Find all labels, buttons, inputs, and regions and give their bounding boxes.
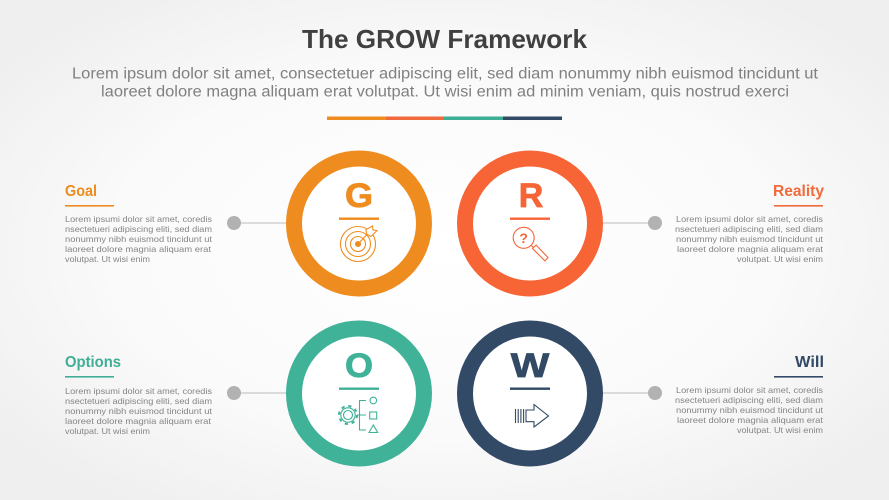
panel: goal xyxy=(65,158,424,288)
heading: will: Will xyxy=(795,354,824,371)
text block: reality xyxy=(675,214,824,264)
panel: options xyxy=(65,328,424,458)
underline: will xyxy=(774,376,823,378)
icon: magnifier with question mark xyxy=(513,227,548,261)
rule: R xyxy=(510,218,550,220)
letter: O: O xyxy=(345,347,373,385)
heading: goal: Goal xyxy=(65,183,97,200)
underline: options xyxy=(65,376,114,378)
connector: goal xyxy=(227,216,287,230)
panel: will xyxy=(465,328,824,458)
icon: gear with branching shapes xyxy=(339,397,378,432)
text block: reality: laoreet dolore magnia aliquam erat xyxy=(677,244,824,254)
text block: will: laoreet dolore magnia aliquam erat xyxy=(677,415,824,425)
text block: will: volutpat. Ut wisi enim xyxy=(737,425,823,435)
connector: options xyxy=(227,386,287,400)
ring: options xyxy=(294,328,424,458)
letter: R: R xyxy=(519,177,543,215)
underline: goal xyxy=(65,205,114,207)
text block: goal: nsectetueri adipiscing eliti, sed diam xyxy=(65,224,212,234)
text block: goal xyxy=(65,214,213,264)
icon: arrow with speed lines xyxy=(516,404,548,427)
rule: G xyxy=(339,218,379,220)
text block: options: Lorem ipsumi dolor sit amet, coredis xyxy=(65,386,212,396)
title: The GROW Framework xyxy=(302,24,588,54)
underline: reality xyxy=(774,205,823,207)
text block: options: nsectetueri adipiscing eliti, sed diam xyxy=(65,396,212,406)
text block: goal: volutpat. Ut wisi enim xyxy=(65,254,150,264)
text block: will xyxy=(675,385,824,435)
text block: will: nonummy nibh euismod tincidunt ut xyxy=(676,405,824,415)
subtitle text block: Lorem ipsum dolor sit amet, consectetuer adipiscing elit, sed diam nonummy nibh euismod tincidunt ut xyxy=(72,66,819,82)
letter: W: W xyxy=(511,346,550,384)
text block: goal: laoreet dolore magnia aliquam erat xyxy=(65,244,212,254)
text block: options: nonummy nibh euismod tincidunt ut xyxy=(65,406,213,416)
text block: options: volutpat. Ut wisi enim xyxy=(65,426,150,436)
ring: goal xyxy=(294,158,424,288)
text block: goal: Lorem ipsumi dolor sit amet, coredis xyxy=(65,214,212,224)
icon: magnifier with question mark: ? xyxy=(519,230,528,246)
heading: options: Options xyxy=(65,354,121,371)
text block: goal: nonummy nibh euismod tincidunt ut xyxy=(65,234,213,244)
rule: O xyxy=(339,388,379,390)
connector: reality xyxy=(602,216,662,230)
rule: W xyxy=(510,388,550,390)
text block: reality: nsectetueri adipiscing eliti, sed diam xyxy=(675,224,823,234)
heading: reality: Reality xyxy=(773,183,824,200)
subtitle text block xyxy=(72,66,819,100)
icon: target with arrow xyxy=(340,226,377,262)
ring: reality xyxy=(465,158,595,288)
text block: will: nsectetueri adipiscing eliti, sed diam xyxy=(675,395,823,405)
subtitle text block: laoreet dolore magna aliquam erat volutpat. Ut wisi enim ad minim veniam, quis nostrud exerci xyxy=(101,84,789,100)
text block: reality: Lorem ipsumi dolor sit amet, coredis xyxy=(676,214,823,224)
text block: reality: nonummy nibh euismod tincidunt ut xyxy=(676,234,824,244)
text block: options: laoreet dolore magnia aliquam erat xyxy=(65,416,212,426)
text block: options xyxy=(65,386,213,436)
text block: will: Lorem ipsumi dolor sit amet, coredis xyxy=(676,385,823,395)
panel: reality xyxy=(465,158,824,288)
ring: will xyxy=(465,328,595,458)
text block: reality: volutpat. Ut wisi enim xyxy=(737,254,823,264)
four-colour divider bar xyxy=(327,116,562,120)
letter: G: G xyxy=(345,177,373,215)
connector: will xyxy=(602,386,662,400)
